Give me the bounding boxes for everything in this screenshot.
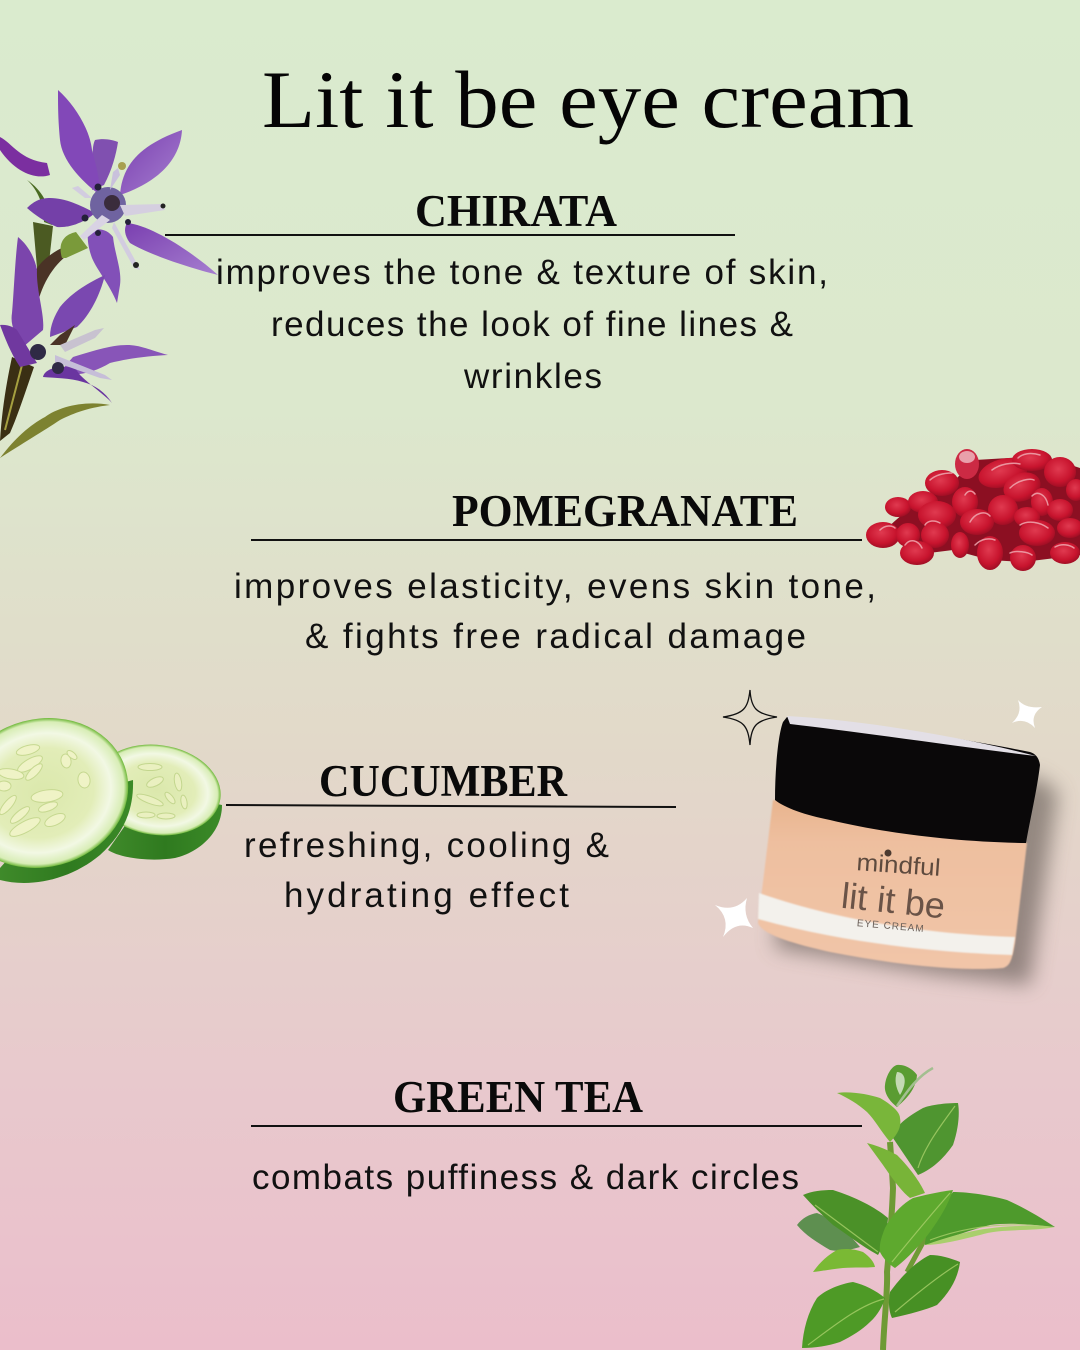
panel: green tea (251, 1072, 862, 1197)
stems and leaf (0, 403, 110, 458)
icon: pomegranate seeds (866, 449, 1080, 571)
text: cucumber benefits: refreshing, cooling & (244, 826, 609, 865)
panel: cucumber (226, 756, 676, 915)
text: chirata benefits: wrinkles (463, 357, 602, 396)
icon: chirata flower (0, 90, 218, 458)
midribs (808, 1106, 1050, 1345)
panel: chirata (165, 186, 828, 396)
label: lit it be: lit it be (839, 875, 947, 926)
text: chirata benefits: improves the tone & texture of skin, (216, 253, 828, 292)
lid (775, 717, 1040, 843)
icon: brand leaf (884, 850, 892, 856)
icon: green tea sprig (797, 1065, 1055, 1350)
icon: sparkle white bottom (715, 898, 753, 937)
back slice (87, 737, 227, 860)
title: Lit it be eye cream (262, 54, 914, 145)
icon: sparkle white top (1012, 700, 1042, 728)
label: eye cream: EYE CREAM (856, 918, 924, 935)
label: mindful: mindful (856, 849, 941, 882)
bud (885, 1065, 917, 1107)
text: cucumber benefits (244, 826, 609, 915)
leaves (893, 1103, 959, 1175)
text: pomegranate benefits: improves elasticity, evens skin tone, (234, 567, 876, 606)
icon: cucumber slices (0, 699, 227, 887)
product: eye cream jar (758, 716, 1058, 985)
lower flower petals (12, 237, 43, 347)
icon: sparkle outline (723, 690, 777, 745)
upper flower petals (0, 137, 50, 176)
heading: pomegranate: POMEGRANATE (452, 486, 798, 536)
panel: pomegranate (234, 486, 876, 656)
text: pomegranate benefits (234, 567, 876, 656)
glass band (758, 893, 1015, 955)
text: pomegranate benefits: & fights free radical damage (305, 617, 806, 656)
text: chirata benefits (216, 253, 828, 396)
jar body (758, 800, 1027, 969)
heading: cucumber: CUCUMBER (319, 756, 567, 806)
front slice (0, 699, 145, 887)
text: chirata benefits: reduces the look of fine lines & (271, 305, 793, 344)
text: cucumber benefits: hydrating effect (284, 876, 569, 915)
upper flower stamens (120, 204, 165, 216)
heading: green tea: GREEN TEA (393, 1072, 643, 1122)
text: green tea benefits: combats puffiness & dark circles (252, 1158, 799, 1197)
heading: chirata: CHIRATA (415, 186, 617, 236)
